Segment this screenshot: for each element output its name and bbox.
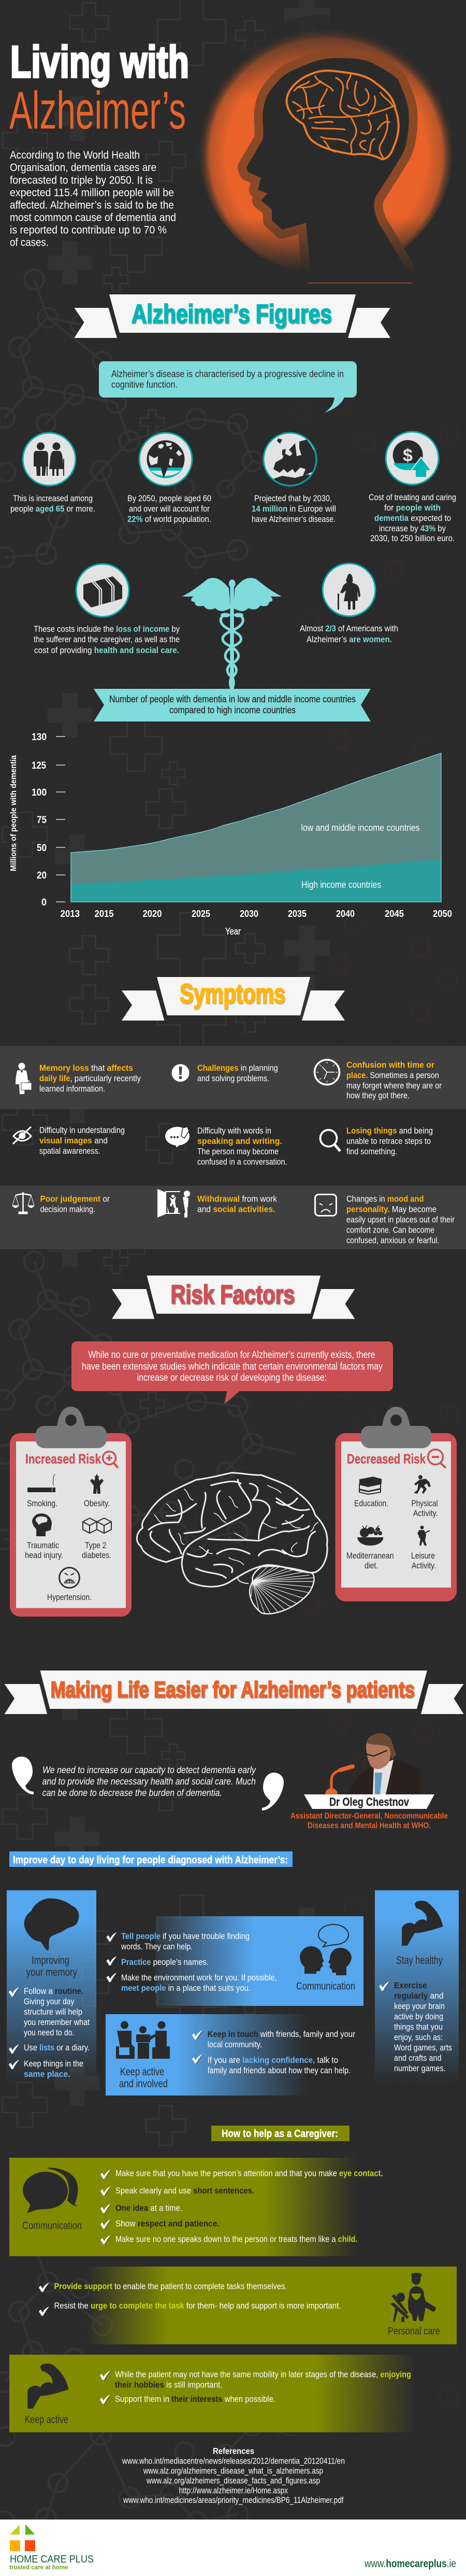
figure: cost of treating: Cost of treating and caring bbox=[369, 493, 456, 502]
icon: sad face bbox=[315, 1194, 337, 1216]
logo: Home Care Plus: trusted care at home bbox=[9, 2564, 68, 2571]
figure: 14 million in Europe: have Alzheimer’s disease. bbox=[252, 515, 336, 524]
icon: clipboard clip bbox=[360, 1407, 432, 1448]
panel: increased risk clipboard: Hypertension. bbox=[47, 1593, 92, 1602]
y axis: 125 bbox=[32, 760, 46, 771]
icon: rising cost: $ bbox=[403, 446, 413, 465]
portrait: Dr Oleg Chestnov bbox=[290, 1733, 448, 1830]
y axis bbox=[9, 732, 65, 908]
icon: flexed arm bbox=[27, 2363, 68, 2409]
figure: aged 65: people aged 65 or more. bbox=[10, 504, 95, 514]
panel: improving your memory: Giving your day bbox=[24, 1997, 75, 2006]
icon: clipboard clip bbox=[35, 1407, 107, 1448]
panel: symptoms row 2: unable to retrace steps to bbox=[346, 1137, 431, 1146]
title: Alzheimer’s bbox=[9, 81, 186, 140]
area chart: people with dementia bbox=[9, 732, 452, 937]
quote: and to provide the necessary health and social care. Much bbox=[42, 1776, 256, 1787]
face bbox=[366, 1735, 391, 1769]
figure: loss of income bbox=[34, 564, 180, 655]
panel: caregiver communication: One idea at a time. bbox=[115, 2203, 182, 2213]
panel: stay healthy bbox=[375, 1890, 459, 2084]
panel: keep active and involved: Keep active bbox=[120, 2066, 164, 2078]
x axis: 2020 bbox=[143, 909, 162, 919]
chart area: low and middle income bbox=[71, 753, 441, 902]
figure: loss of income: cost of providing health and social care. bbox=[34, 646, 179, 655]
panel: stay healthy: regularly and bbox=[394, 1991, 443, 2001]
portrait: Dr Oleg Chestnov: Diseases and Mental Health at WHO. bbox=[308, 1821, 431, 1830]
panel: symptoms row 1: how they got there. bbox=[346, 1091, 410, 1100]
panel: caregiver communication bbox=[9, 2158, 383, 2256]
intro paragraph: is reported to contribute up to 70 % bbox=[10, 224, 167, 236]
intro paragraph: affected. Alzheimer’s is said to be the bbox=[10, 199, 174, 211]
intro paragraph: According to the World Health bbox=[10, 149, 140, 161]
icon: clock bbox=[315, 1060, 340, 1085]
figure: aged 65 bbox=[10, 433, 95, 514]
callout: no cure: While no cure or preventative medication for Alzheimer’s currently exists, there bbox=[88, 1350, 375, 1361]
icon: two heads and speech bubble bbox=[300, 1924, 352, 1975]
panel: symptoms row 1: and solving problems. bbox=[197, 1074, 269, 1083]
panel: personal care: Provide support to enable the patient to complete tasks themselves. bbox=[54, 2282, 287, 2291]
panel: decreased risk clipboard: Activity. bbox=[412, 1561, 436, 1570]
panel: improving your memory bbox=[7, 1890, 96, 2084]
quote: We need to increase our capacity to detect dementia early bbox=[42, 1765, 256, 1775]
banner: Symptoms bbox=[122, 977, 345, 1021]
panel: symptoms row 3: decision making. bbox=[40, 1205, 95, 1214]
panel: symptoms row 1: may forget where they are or bbox=[346, 1081, 442, 1091]
panel: decreased risk clipboard: Activity. bbox=[413, 1509, 438, 1518]
intro paragraph: most common cause of dementia and bbox=[10, 211, 176, 224]
head illustration with orange glow bbox=[192, 15, 466, 282]
panel: improving your memory: Keep things in the bbox=[24, 2059, 83, 2069]
x axis: 2025 bbox=[192, 909, 210, 919]
panel: improving your memory: same place. bbox=[24, 2070, 70, 2079]
y axis: 50 bbox=[37, 843, 47, 854]
panel: keep active and involved: Keep in touch with friends, family and your bbox=[208, 2030, 355, 2039]
panel: symptoms row 2: spatial awareness. bbox=[39, 1147, 100, 1156]
panel: increased risk clipboard bbox=[10, 1407, 132, 1617]
panel: keep active and involved: If you are lacking confidence, talk to bbox=[208, 2056, 338, 2065]
figure: cost of treating bbox=[369, 432, 456, 543]
icon: opening quote mark bbox=[12, 1757, 34, 1794]
panel: communication: Make the environment work for you. If possible, bbox=[121, 1973, 276, 1983]
icon: speech bubble with pencil bbox=[165, 1127, 190, 1148]
panel: symptoms row 1: Confusion with time or bbox=[346, 1060, 435, 1070]
panel: stay healthy: Stay healthy bbox=[396, 1955, 443, 1966]
intro paragraph bbox=[10, 149, 176, 249]
panel: keep active and involved: and involved bbox=[119, 2078, 168, 2090]
heading: how to help as a caregiver: How to help as a Caregiver: bbox=[222, 2128, 338, 2140]
icon: stack of money bbox=[83, 576, 122, 607]
microphone bbox=[325, 1766, 353, 1794]
intro paragraph: Organisation, dementia cases are bbox=[10, 162, 156, 174]
panel: caregiver keep active: Keep active bbox=[25, 2414, 68, 2426]
panel: improving your memory: you need to do. bbox=[24, 2028, 75, 2037]
panel: decreased risk clipboard bbox=[336, 1407, 457, 1602]
figure: 22% of world population bbox=[127, 433, 211, 524]
name ribbon bbox=[304, 1794, 434, 1809]
icon: person with briefcase bbox=[16, 1063, 32, 1094]
references: http://www.alzheimer.ie/Home.aspx bbox=[179, 2486, 288, 2495]
area chart: people with dementia: low and middle income countries bbox=[301, 823, 419, 833]
panel: increased risk clipboard: Obesity. bbox=[84, 1499, 110, 1508]
icon: runner bbox=[414, 1475, 431, 1494]
panel: decreased risk clipboard: Education. bbox=[354, 1499, 388, 1508]
icon: brain silhouette bbox=[24, 1899, 79, 1951]
panel: decreased risk clipboard: Mediterranean bbox=[346, 1551, 394, 1561]
panel: decreased risk clipboard: Leisure bbox=[411, 1551, 435, 1561]
y axis: 20 bbox=[37, 870, 47, 881]
figure: cost of treating: dementia expected to bbox=[374, 514, 451, 523]
icon: meeting people bbox=[116, 2021, 170, 2059]
figure: cost of treating: increase by 43% by bbox=[379, 524, 446, 533]
panel: symptoms row 2: speaking and writing. bbox=[197, 1137, 282, 1146]
icon: elderly couple bbox=[34, 443, 64, 476]
icon: elderly woman bbox=[338, 574, 360, 610]
panel: improving your memory: structure will help bbox=[24, 2007, 82, 2017]
panel: personal care: Personal care bbox=[388, 2326, 440, 2337]
icon: carer and patient bbox=[390, 2273, 436, 2322]
panel: keep active and involved bbox=[106, 2014, 355, 2096]
icon: magnifier plus bbox=[103, 1451, 118, 1468]
y axis: 100 bbox=[32, 787, 47, 798]
panel: decreased risk clipboard: Decreased Risk bbox=[347, 1451, 426, 1467]
panel: caregiver communication: Make sure that you have the person’s attention and that you make eye contact. bbox=[115, 2169, 383, 2178]
x axis: 2015 bbox=[94, 909, 114, 919]
figure: 14 million in Europe: Projected that by 2030, bbox=[254, 494, 332, 503]
footer: www.homecareplus.ie bbox=[364, 2558, 456, 2570]
panel: caregiver communication: Communication bbox=[22, 2220, 82, 2232]
icon: scales bbox=[12, 1192, 34, 1214]
x axis: 2045 bbox=[385, 909, 404, 919]
icon: crossed-out eye bbox=[13, 1127, 31, 1144]
panel: stay healthy: and crafts and bbox=[394, 2054, 441, 2063]
icon: flexed arm bbox=[402, 1901, 443, 1946]
panel: symptoms row 1 bbox=[0, 1046, 466, 1109]
references: www.alz.org/alzheimers_disease_what_is_alzheimers.asp bbox=[143, 2466, 323, 2475]
panel: improving your memory: Follow a routine. bbox=[24, 1987, 83, 1996]
panel: increased risk clipboard: Traumatic bbox=[27, 1541, 59, 1550]
illustration: white-line brain bbox=[137, 1473, 327, 1614]
panel: stay healthy: keep your brain bbox=[394, 2002, 445, 2011]
y axis: 0 bbox=[41, 897, 47, 908]
panel: symptoms row 3: Changes in mood and bbox=[346, 1194, 424, 1204]
references: www.alz.org/alzheimers_disease_facts_and_figures.asp bbox=[146, 2476, 320, 2486]
panel: symptoms row 3: Withdrawal from work bbox=[197, 1194, 278, 1204]
suit and shirt bbox=[348, 1759, 420, 1794]
panel: communication: meet people in a place that suits you. bbox=[121, 1984, 251, 1993]
panel: communication: Tell people if you have trouble finding bbox=[121, 1932, 250, 1941]
area chart: people with dementia: High income countries bbox=[301, 880, 381, 890]
panel: symptoms row 1: place. Sometimes a person bbox=[346, 1071, 439, 1080]
panel: keep active and involved: family and friends about how they can help. bbox=[208, 2066, 351, 2075]
icon: rising cost bbox=[393, 440, 431, 477]
panel: symptoms row 1: Challenges in planning bbox=[197, 1064, 278, 1073]
y axis: 75 bbox=[37, 815, 47, 826]
icon: cigarette bbox=[27, 1474, 55, 1492]
callout: progressive decline bbox=[99, 361, 357, 413]
panel: symptoms row 2: find something. bbox=[346, 1147, 397, 1156]
panel: stay healthy: enjoy, such as: bbox=[394, 2033, 443, 2042]
panel: decreased risk clipboard: Physical bbox=[411, 1499, 438, 1508]
panel: caregiver communication: Show respect and patience. bbox=[115, 2218, 220, 2229]
y axis: Millions of people with dementia bbox=[9, 755, 18, 871]
icon: exclamation bbox=[172, 1064, 190, 1082]
panel: symptoms row 2: The person may become bbox=[197, 1147, 279, 1156]
chart heading ribbon: compared to high income countries bbox=[169, 705, 296, 715]
panel: symptoms row 3 bbox=[0, 1186, 466, 1249]
chart heading ribbon: Number of people with dementia in low and middle income countries bbox=[109, 694, 356, 704]
panel: caregiver keep active bbox=[9, 2355, 415, 2432]
title bbox=[9, 37, 189, 140]
x axis: 2040 bbox=[336, 909, 355, 919]
intro paragraph: of cases. bbox=[10, 236, 49, 249]
panel: symptoms row 2: visual images and bbox=[39, 1136, 108, 1145]
panel: caregiver keep active: Support them in their interests when possible. bbox=[115, 2394, 275, 2404]
icon: magnifying glass bbox=[320, 1130, 340, 1151]
panel: symptoms row 2: confused in a conversation. bbox=[197, 1157, 287, 1167]
banner: Alzheimer's Figures: Alzheimer’s Figures bbox=[132, 299, 332, 329]
panel: increased risk clipboard: Increased Risk bbox=[25, 1451, 101, 1467]
figure: women: Alzheimer’s are women. bbox=[307, 635, 392, 644]
panel: caregiver keep active: While the patient may not have the same mobility in later stages of the disease, enjoying bbox=[115, 2370, 411, 2379]
figure: 14 million in Europe: 14 million in Europe will bbox=[252, 504, 336, 514]
panel: keep active and involved: local community. bbox=[208, 2040, 262, 2049]
heading: improve day to day living: Improve day to day living for people diagnosed with Alzheimer’s: bbox=[13, 1855, 288, 1866]
x axis: 2013 bbox=[60, 909, 80, 919]
figure: loss of income: the sufferer and the caregiver, as well as the bbox=[34, 635, 180, 644]
banner: Alzheimer's Figures bbox=[75, 294, 390, 338]
panel: personal care: Resist the urge to complete the task for them- help and support is more important. bbox=[54, 2301, 341, 2311]
icon: guitar player bbox=[417, 1526, 430, 1546]
panel: communication: Communication bbox=[296, 1981, 355, 1992]
panel: improving your memory: Use lists or a diary. bbox=[24, 2043, 90, 2053]
references: References bbox=[213, 2446, 254, 2456]
figure: women: Almost 2/3 of Americans with bbox=[300, 624, 398, 633]
icon: sugar cubes bbox=[83, 1518, 111, 1533]
panel: increased risk clipboard: Type 2 bbox=[85, 1541, 107, 1550]
panel: communication: words. They can help. bbox=[121, 1942, 193, 1951]
panel: caregiver communication: Speak clearly and use short sentences. bbox=[115, 2186, 254, 2196]
panel: symptoms row 2 bbox=[13, 1126, 433, 1167]
callout: no cure: increase or decrease risk of developing the disease: bbox=[137, 1372, 327, 1383]
logo: Home Care Plus: HOME CARE PLUS bbox=[10, 2554, 94, 2565]
panel: improving your memory: your memory bbox=[26, 1966, 77, 1978]
figure: cost of treating: 2030, to 250 billion euro. bbox=[370, 534, 455, 543]
banner: Risk Factors: Risk Factors bbox=[171, 1280, 295, 1309]
name ribbon: Dr Oleg Chestnov bbox=[329, 1795, 410, 1808]
panel: symptoms row 1: Memory loss that affects bbox=[39, 1064, 133, 1073]
banner: Symptoms: Symptoms bbox=[180, 979, 285, 1009]
references: www.who.int/mediacentre/news/releases/2012/dementia_20120411/en bbox=[122, 2457, 345, 2466]
callout: progressive decline: Alzheimer’s disease is characterised by a progressive decline in bbox=[111, 369, 344, 379]
intro paragraph: forecasted to triple by 2050. It is bbox=[10, 174, 153, 187]
panel: stay healthy: number games. bbox=[394, 2064, 445, 2073]
panel: increased risk clipboard: Smoking. bbox=[27, 1499, 57, 1508]
panel: caregiver communication: Make sure no one speaks down to the person or treats them like a child. bbox=[115, 2234, 358, 2244]
figure: 14 million in Europe bbox=[252, 433, 336, 524]
x axis bbox=[60, 909, 452, 937]
chart area: high income bbox=[71, 859, 441, 902]
panel: decreased risk clipboard: diet. bbox=[365, 1561, 378, 1570]
panel: communication: Practice people’s names. bbox=[121, 1958, 209, 1967]
panel: symptoms row 2: Difficulty in understanding bbox=[39, 1126, 125, 1135]
icon: speech bubbles bbox=[23, 2168, 78, 2213]
panel: symptoms row 3: comfort zone. Can become bbox=[346, 1225, 434, 1235]
icon: globe bbox=[147, 441, 184, 478]
y axis: 130 bbox=[32, 732, 47, 743]
figure: 22% of world population: By 2050, people aged 60 bbox=[127, 494, 211, 503]
footer bbox=[0, 2520, 466, 2576]
title: Living with bbox=[10, 37, 189, 87]
panel: symptoms row 3: Poor judgement or bbox=[40, 1194, 110, 1204]
intro paragraph: expected 115.4 million people will be bbox=[10, 187, 174, 199]
logo: Home Care Plus bbox=[9, 2524, 94, 2571]
icon: fruit bowl bbox=[357, 1525, 383, 1546]
panel: symptoms row 2: Difficulty with words in bbox=[197, 1126, 271, 1136]
icon: obese man bbox=[90, 1474, 104, 1494]
callout: no cure bbox=[71, 1341, 393, 1404]
chart heading ribbon bbox=[94, 689, 371, 721]
panel: symptoms row 2: Losing things and being bbox=[346, 1126, 433, 1136]
panel: stay healthy: things that you bbox=[394, 2022, 443, 2032]
figure: aged 65: This is increased among bbox=[13, 494, 93, 503]
panel: symptoms row 3: and social activities. bbox=[197, 1205, 275, 1214]
x axis: Year bbox=[225, 926, 241, 937]
panel: stay healthy: Word games, arts bbox=[394, 2043, 452, 2053]
icon: angry face bbox=[59, 1567, 80, 1588]
panel: increased risk clipboard: head injury. bbox=[25, 1551, 63, 1560]
icon: books bbox=[359, 1477, 381, 1494]
brain drawing in head bbox=[287, 70, 399, 159]
panel: stay healthy: Exercise bbox=[394, 1981, 427, 1990]
figure: women bbox=[300, 563, 398, 644]
heading: improve day to day living bbox=[9, 1851, 293, 1867]
references bbox=[122, 2446, 345, 2505]
figure: cost of treating: for people with bbox=[384, 503, 441, 513]
panel: symptoms row 3: personality. May become bbox=[346, 1205, 436, 1214]
icon: caduceus bbox=[182, 578, 282, 688]
icon: door and withdrawn person bbox=[157, 1189, 190, 1218]
quote bbox=[12, 1757, 284, 1810]
panel: symptoms row 1: daily life, particularly recently bbox=[39, 1074, 141, 1083]
panel: symptoms row 3: confused, anxious or fearful. bbox=[346, 1236, 439, 1245]
panel: increased risk clipboard: diabetes. bbox=[82, 1551, 111, 1560]
panel: communication bbox=[107, 1916, 363, 2006]
panel: personal care bbox=[39, 2267, 457, 2344]
x axis: 2030 bbox=[240, 909, 258, 919]
panel: improving your memory: Improving bbox=[32, 1955, 69, 1966]
banner: Making Life Easier bbox=[5, 1671, 464, 1714]
panel: stay healthy: active by doing bbox=[394, 2012, 443, 2021]
quote: can be done to decrease the burden of dementia. bbox=[42, 1788, 222, 1798]
icon: closing quote mark bbox=[262, 1773, 284, 1810]
x axis: 2035 bbox=[288, 909, 307, 919]
icon: head injury bbox=[32, 1513, 52, 1536]
figure: 22% of world population: and over will account for bbox=[129, 504, 210, 514]
callout: progressive decline: cognitive function. bbox=[111, 379, 178, 390]
x axis: 2050 bbox=[433, 909, 452, 919]
icon: magnifier minus bbox=[428, 1449, 446, 1468]
references: www.who.int/medicines/areas/priority_medicines/BP6_11Alzheimer.pdf bbox=[123, 2496, 344, 2505]
panel: improving your memory: you remember what bbox=[24, 2018, 90, 2027]
panel: caregiver keep active: their hobbies is still important. bbox=[115, 2380, 222, 2389]
panel: symptoms row 1: learned information. bbox=[39, 1084, 105, 1094]
heading: how to help as a caregiver bbox=[211, 2126, 350, 2141]
figure: 22% of world population: 22% of world population. bbox=[127, 515, 211, 524]
icon: map of Europe bbox=[273, 438, 316, 485]
callout: no cure: have been extensive studies which indicate that certain environmental factors may bbox=[82, 1361, 383, 1372]
figure: loss of income: These costs include the loss of income by bbox=[34, 625, 180, 634]
banner: Risk Factors bbox=[112, 1276, 355, 1319]
